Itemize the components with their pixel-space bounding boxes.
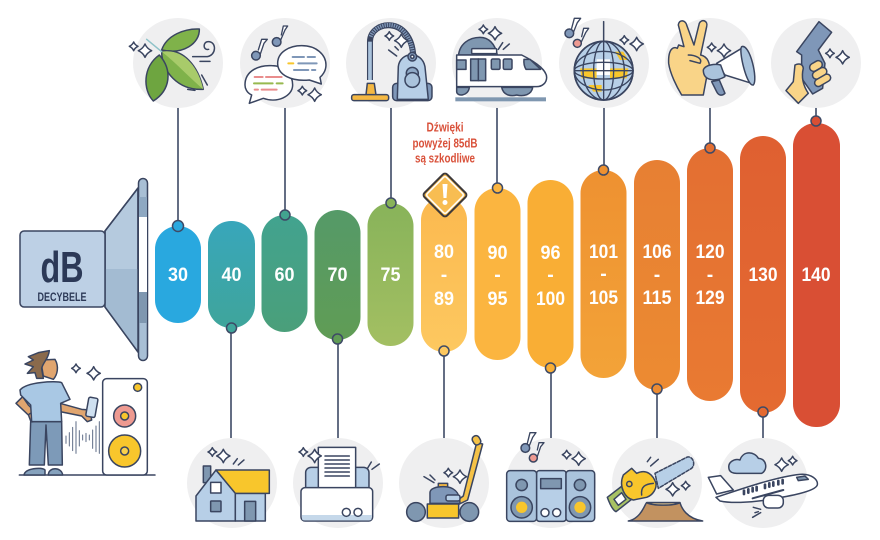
bar: 90-95 dB: - bbox=[494, 264, 501, 286]
icon: airplane and cloud bbox=[708, 453, 817, 517]
bar: 96-100 dB: 100 bbox=[536, 288, 565, 310]
bar: 140 dB: 140 bbox=[802, 264, 831, 286]
warning note: harmful above 85dB bbox=[412, 120, 478, 166]
icon: stereo system bbox=[507, 433, 595, 521]
bar: 101-105 dB: - bbox=[600, 263, 607, 285]
icon: house bbox=[196, 448, 269, 521]
icon: warning diamond bbox=[422, 172, 468, 218]
bar: 30 dB bbox=[155, 226, 201, 323]
warning note: harmful above 85dB: powyżej 85dB bbox=[412, 136, 478, 150]
bar: 90-95 dB bbox=[474, 188, 520, 360]
bar: 101-105 dB: 105 bbox=[589, 287, 618, 309]
bar: 70 dB bbox=[314, 210, 360, 340]
scale bars with decibel values bbox=[155, 123, 840, 427]
bar: 96-100 dB: 96 bbox=[540, 242, 561, 264]
bottom icons group 1 bbox=[196, 434, 483, 521]
bar: 120-129 dB: - bbox=[707, 264, 713, 286]
bar: 40 dB bbox=[208, 221, 255, 328]
icon: disco ball and notes bbox=[565, 18, 643, 100]
connector nodes bbox=[172, 116, 821, 417]
bar: 130 dB bbox=[740, 136, 786, 413]
bar: 140 dB bbox=[793, 123, 840, 427]
bar: 106-115 dB: 106 bbox=[642, 241, 672, 263]
bar: 101-105 dB bbox=[580, 170, 626, 378]
bar: 106-115 dB: - bbox=[654, 264, 660, 286]
bar: 106-115 dB: 115 bbox=[642, 287, 672, 309]
bar: 40 dB: 40 bbox=[222, 264, 242, 286]
bar: 120-129 dB: 129 bbox=[696, 287, 725, 309]
bar: 60 dB: 60 bbox=[274, 264, 295, 286]
icon: printer bbox=[299, 447, 379, 521]
loudspeaker cabinet bbox=[103, 379, 147, 475]
bar: 101-105 dB: 101 bbox=[589, 241, 618, 263]
icon: lawn mower bbox=[407, 434, 483, 521]
bar: 80-89 dB: 89 bbox=[434, 288, 454, 310]
bar: 120-129 dB: 120 bbox=[696, 241, 725, 263]
bar: 90-95 dB: 90 bbox=[488, 242, 508, 264]
top icons group 2 bbox=[455, 18, 849, 103]
bar: 106-115 dB bbox=[634, 160, 680, 390]
bar: 75 dB bbox=[368, 203, 414, 346]
bar: 80-89 dB bbox=[421, 197, 467, 352]
warning note: harmful above 85dB: są szkodliwe bbox=[415, 150, 475, 166]
bar: 60 dB bbox=[262, 215, 308, 332]
bar: 80-89 dB: - bbox=[441, 264, 447, 286]
bar: 130 dB: 130 bbox=[748, 264, 778, 286]
icon: victory hand and megaphone bbox=[669, 21, 755, 95]
icon: hand with gun bbox=[786, 22, 849, 103]
speaker with dB label bbox=[20, 178, 148, 360]
connector lines bbox=[178, 107, 816, 438]
speaker label: DECYBELE: DECYBELE bbox=[38, 290, 86, 304]
bar: 96-100 dB bbox=[528, 180, 574, 368]
top icons group 1 bbox=[129, 25, 432, 103]
bar: 80-89 dB: 80 bbox=[434, 241, 454, 263]
icon: chainsaw on tree stump bbox=[607, 457, 703, 521]
speaker label: dB: dB bbox=[40, 243, 84, 292]
bar: 120-129 dB bbox=[687, 148, 733, 401]
bar: 75 dB: 75 bbox=[380, 264, 401, 286]
bar: 96-100 dB: - bbox=[547, 264, 554, 286]
icon: conversation and music bbox=[245, 26, 326, 103]
bottom icons group 2 bbox=[507, 433, 817, 521]
icon: vacuum cleaner bbox=[352, 25, 432, 101]
icon circles bbox=[133, 18, 861, 528]
bar: 90-95 dB: 95 bbox=[488, 288, 508, 310]
bar: 70 dB: 70 bbox=[328, 264, 348, 286]
icon: leaves in the wind bbox=[129, 29, 214, 101]
person listening next to loudspeaker bbox=[16, 351, 155, 475]
warning note: harmful above 85dB: Dźwięki bbox=[426, 120, 464, 134]
bar: 30 dB: 30 bbox=[168, 264, 188, 286]
icon: train bbox=[455, 25, 547, 101]
